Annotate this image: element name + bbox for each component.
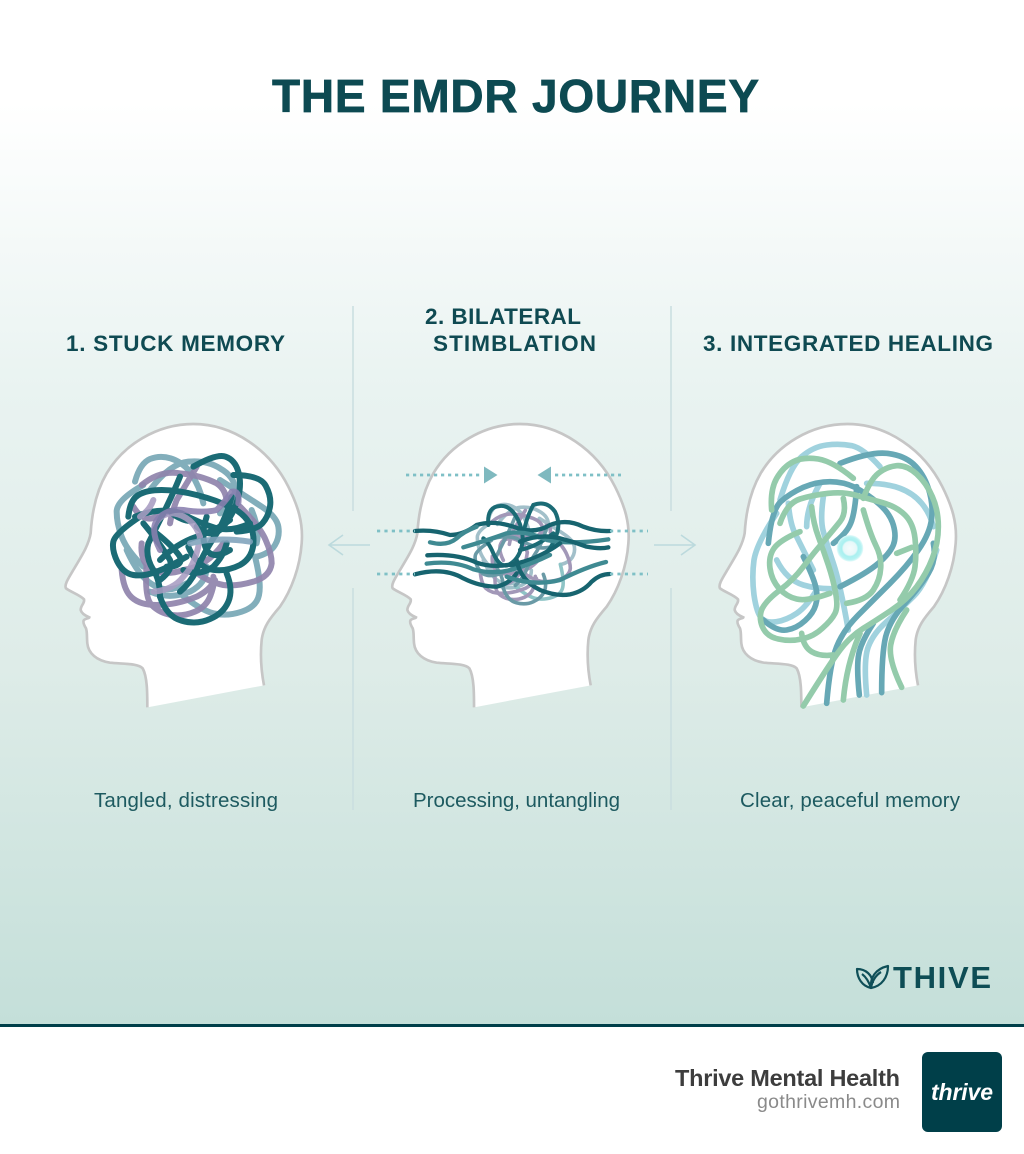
caption: step 1: Tangled, distressing [94, 789, 278, 812]
heading: step 1: 1. STUCK MEMORY [66, 331, 285, 356]
footer bar [0, 1024, 1024, 1154]
icon: head with flowing lines [720, 424, 956, 707]
footer logo: thrive [931, 1079, 993, 1105]
panel: integrated healing [703, 331, 993, 812]
heading: step 3: 3. INTEGRATED HEALING [703, 331, 993, 356]
dotted lines: side signals [377, 531, 648, 574]
logo: thive wordmark: THIVE [893, 960, 991, 995]
heading: step 2: STIMBLATION [433, 331, 596, 356]
heading: step 2: 2. BILATERAL [425, 304, 581, 329]
panel: stuck memory [66, 331, 302, 812]
heading: step 2 [425, 304, 596, 356]
dotted arrow: stimulation right [538, 466, 621, 484]
footer url: gothrivemh.com [757, 1091, 900, 1113]
footer logo [922, 1052, 1002, 1132]
icon: head with tangled lines [66, 424, 302, 707]
dotted arrow: stimulation left [406, 466, 498, 484]
icon: leaves [857, 966, 888, 988]
caption: step 3: Clear, peaceful memory [740, 789, 961, 812]
arrow: left [329, 535, 370, 555]
arrow: right [654, 535, 695, 555]
footer brand name: Thrive Mental Health [675, 1065, 900, 1091]
caption: step 2: Processing, untangling [413, 789, 620, 812]
panel: bilateral stimulation [377, 304, 648, 812]
glow at center [837, 535, 863, 562]
title: THE EMDR JOURNEY [272, 70, 759, 122]
icon: head with bilateral stimulation [392, 424, 629, 707]
